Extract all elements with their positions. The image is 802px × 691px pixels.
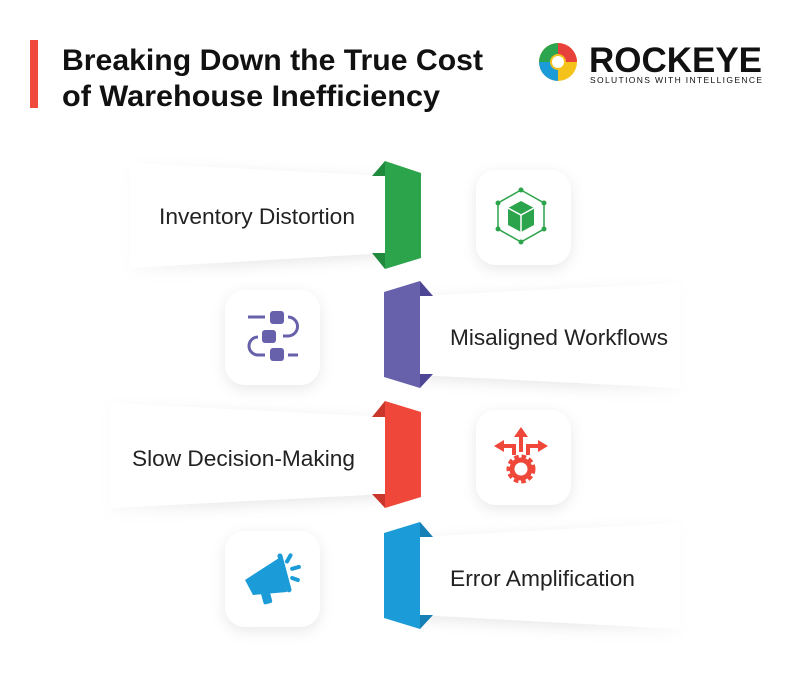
ribbon band	[372, 401, 421, 508]
icon: gear with arrows	[494, 427, 548, 480]
icon card	[225, 531, 320, 627]
label: Misaligned Workflows	[450, 325, 668, 350]
logo text: ROCKEYE	[589, 41, 762, 80]
icon card	[225, 290, 320, 385]
row 3: Slow Decision-Making	[80, 390, 571, 525]
ribbon band	[384, 522, 433, 629]
label: Error Amplification	[450, 566, 635, 591]
title: Breaking Down the True Cost	[62, 44, 483, 77]
text panel	[420, 523, 680, 629]
text panel	[130, 163, 385, 268]
icon: box	[496, 188, 546, 244]
icon: workflow	[248, 311, 298, 361]
logo	[539, 41, 762, 85]
ribbon band	[384, 281, 433, 388]
row 4: Error Amplification	[225, 510, 710, 645]
icon card	[476, 410, 571, 505]
text panel	[110, 403, 385, 508]
row 2: Misaligned Workflows	[225, 270, 710, 405]
text panel	[420, 283, 680, 388]
title: of Warehouse Inefficiency	[62, 80, 440, 113]
icon card	[476, 170, 571, 265]
label: Inventory Distortion	[159, 204, 355, 229]
icon: megaphone	[245, 553, 301, 605]
label: Slow Decision-Making	[132, 446, 355, 471]
logo icon	[539, 43, 577, 81]
title accent bar	[30, 40, 38, 108]
title	[62, 44, 483, 113]
ribbon band	[372, 161, 421, 269]
row 1: Inventory Distortion	[100, 150, 571, 285]
logo: SOLUTIONS WITH INTELLIGENCE	[590, 75, 762, 85]
